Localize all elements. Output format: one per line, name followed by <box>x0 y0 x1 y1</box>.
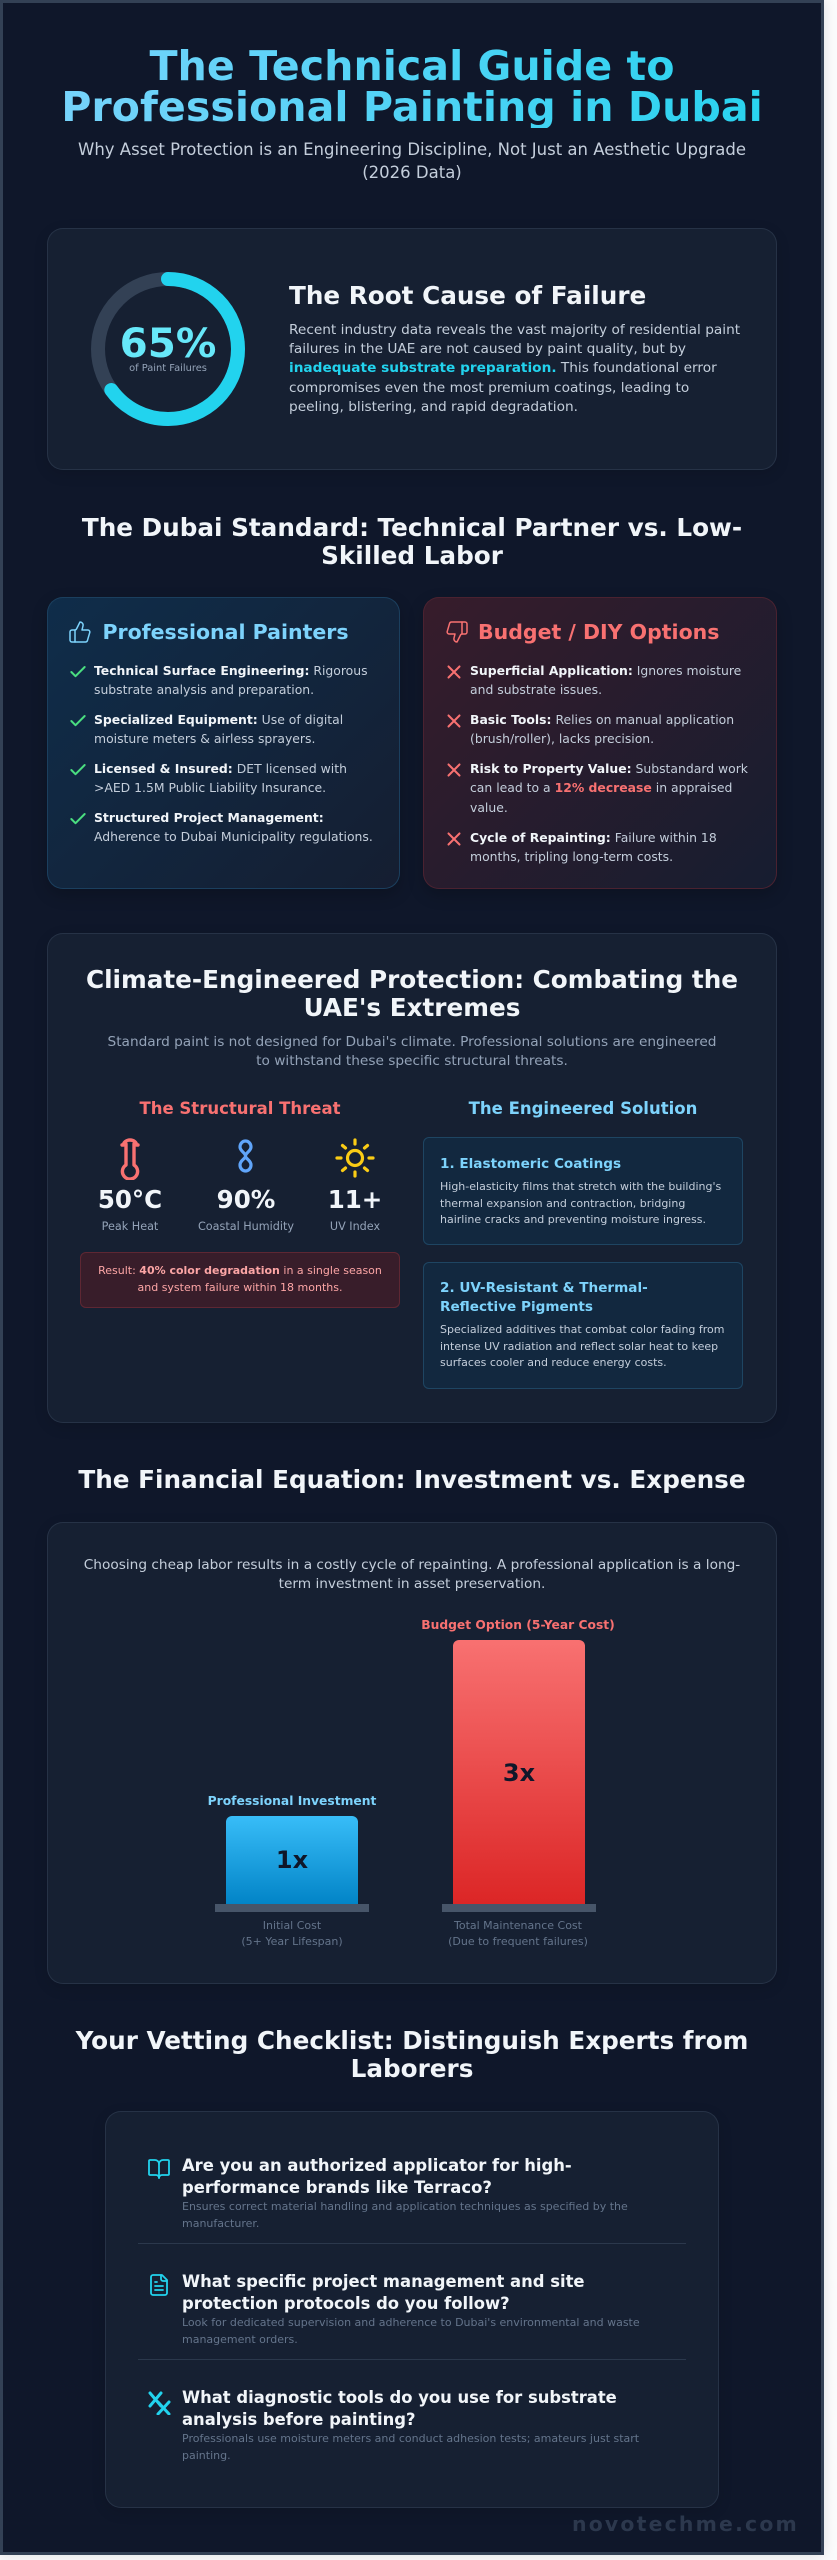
callout: result: and system failure within 18 months. <box>138 1280 342 1294</box>
intro text: term investment in asset preservation. <box>279 1576 545 1592</box>
card text: intense UV radiation and reflect solar heat to keep <box>440 1340 718 1352</box>
card title: 1. Elastomeric Coatings <box>440 1156 621 1172</box>
icon: check 4 <box>70 813 86 824</box>
cross item 2: Basic Tools: Relies on manual application <box>470 712 734 727</box>
question 2: What specific project management and site <box>182 2272 585 2291</box>
icon: check 3 <box>70 764 86 776</box>
bar: 1x: 1x <box>276 1846 308 1874</box>
cross item 4: months, tripling long-term costs. <box>470 849 673 864</box>
base <box>442 1904 596 1912</box>
label: uv index: UV Index <box>330 1220 380 1233</box>
cross item 3: Risk to Property Value: Substandard work <box>470 761 748 776</box>
card: uv-resistant pigments <box>423 1262 743 1389</box>
heading: engineered solution: The Engineered Solution <box>469 1099 697 1118</box>
intro text <box>84 1556 740 1592</box>
intro text: Standard paint is not designed for Dubai's climate. Professional solutions are engineered <box>108 1034 716 1050</box>
description 1: manufacturer. <box>182 2216 259 2230</box>
heading: vetting checklist: Laborers <box>351 2054 473 2082</box>
description 1: Ensures correct material handling and application techniques as specified by the <box>182 2200 628 2213</box>
description 2: Look for dedicated supervision and adherence to Dubai's environmental and waste <box>182 2316 640 2329</box>
bar: 3x <box>453 1640 585 1904</box>
heading: structural threat: The Structural Threat <box>139 1099 341 1118</box>
heading: professional painters: Professional Painters <box>102 620 349 644</box>
stat: peak heat: 50°C <box>98 1184 162 1214</box>
check item 4: Structured Project Management: <box>94 810 324 825</box>
panel: climate-engineered protection <box>47 933 777 1423</box>
check item 2 <box>94 712 343 746</box>
icon: diagnostic crosses <box>148 2391 172 2415</box>
question 1: performance brands like Terraco? <box>182 2178 492 2197</box>
heading: climate: Climate-Engineered Protection: Combating the <box>86 965 738 994</box>
panel: professional painters <box>47 597 400 889</box>
question 2: protection protocols do you follow? <box>182 2294 510 2313</box>
icon: cross 3 <box>448 763 460 777</box>
intro text <box>108 1034 716 1069</box>
question 3: What diagnostic tools do you use for substrate <box>182 2388 617 2407</box>
heading: root cause: The Root Cause of Failure <box>289 281 646 310</box>
cross item 2: (brush/roller), lacks precision. <box>470 731 654 746</box>
icon: book <box>148 2159 170 2179</box>
check item 1 <box>94 662 368 697</box>
description 3 <box>182 2431 639 2464</box>
heading: vetting checklist <box>75 2026 748 2082</box>
icon: sun <box>335 1138 375 1178</box>
cross item 4 <box>470 830 717 864</box>
heading: climate <box>86 965 738 1022</box>
icon: humidity <box>238 1139 253 1173</box>
check item 4 <box>94 810 373 844</box>
subtitle <box>78 140 746 182</box>
check item 1: substrate analysis and preparation. <box>94 682 314 697</box>
cross item 1: Superficial Application: Ignores moisture <box>470 662 741 678</box>
callout: result <box>80 1252 400 1308</box>
cross item 3: can lead to a 12% decrease in appraised <box>470 780 732 795</box>
icon: document <box>150 2274 168 2296</box>
question 2 <box>182 2271 585 2315</box>
card: elastomeric coatings <box>423 1137 743 1245</box>
icon: cross 1 <box>448 665 460 679</box>
heading: the dubai standard <box>82 513 742 570</box>
icon: thumbs up <box>69 621 91 643</box>
description 2: management orders. <box>182 2332 298 2346</box>
description 1 <box>182 2200 628 2230</box>
icon: cross 2 <box>448 714 460 728</box>
heading: the dubai standard: The Dubai Standard: Technical Partner vs. Low- <box>82 513 742 542</box>
heading: vetting checklist: Your Vetting Checklist: Distinguish Experts from <box>76 2026 748 2055</box>
card title <box>440 1280 648 1315</box>
card text: Specialized additives that combat color fading from <box>440 1323 724 1336</box>
icon: thermometer <box>120 1138 140 1180</box>
heading: climate: UAE's Extremes <box>304 992 520 1022</box>
intro text: Choosing cheap labor results in a costly cycle of repainting. A professional application is a long- <box>84 1556 740 1572</box>
title <box>0 46 824 128</box>
label: coastal humidity: Coastal Humidity <box>198 1220 294 1233</box>
check item 2: moisture meters & airless sprayers. <box>94 731 315 746</box>
check item 3: >AED 1.5M Public Liability Insurance. <box>94 780 326 795</box>
check item 1: Technical Surface Engineering: Rigorous <box>94 662 368 678</box>
bar: 3x: 3x <box>503 1759 535 1787</box>
icon: thumbs down <box>446 621 468 643</box>
card title: 2. UV-Resistant & Thermal- <box>440 1280 648 1296</box>
intro text: to withstand these specific structural threats. <box>256 1053 568 1069</box>
foot label: (5+ Year Lifespan) <box>241 1935 343 1948</box>
label: Budget Option (5-Year Cost) <box>421 1618 615 1632</box>
subtitle: (2026 Data) <box>362 162 462 182</box>
check item 2: Specialized Equipment: Use of digital <box>94 712 343 727</box>
card text <box>440 1323 724 1369</box>
panel: budget / diy options <box>423 597 777 889</box>
card text: thermal expansion and contraction, bridging <box>440 1196 685 1210</box>
cross item 4: Cycle of Repainting: Failure within 18 <box>470 830 717 845</box>
label: Professional Investment <box>208 1794 376 1808</box>
cross item 1 <box>470 662 741 697</box>
cross item 3 <box>470 761 748 815</box>
body text: peeling, blistering, and rapid degradation. <box>289 399 578 415</box>
foot label <box>448 1919 588 1948</box>
foot label: Total Maintenance Cost <box>454 1919 582 1932</box>
description 3: painting. <box>182 2448 231 2462</box>
body text <box>289 322 740 415</box>
card text: surfaces cooler and reduce energy costs. <box>440 1356 667 1369</box>
cross item 1: and substrate issues. <box>470 682 602 697</box>
heading: financial equation: The Financial Equation: Investment vs. Expense <box>78 1465 746 1494</box>
check item 3: Licensed & Insured: DET licensed with <box>94 761 347 776</box>
question 3: analysis before painting? <box>182 2410 416 2429</box>
callout: result: Result: 40% color degradation in a single season <box>98 1264 382 1277</box>
icon: check 1 <box>70 666 86 678</box>
icon: check 2 <box>70 715 86 726</box>
check item 3 <box>94 761 347 795</box>
cross item 2 <box>470 712 734 746</box>
bar group: professional investment <box>208 1794 376 1948</box>
icon: cross 4 <box>448 832 460 846</box>
question 1: Are you an authorized applicator for high- <box>182 2156 572 2175</box>
stat: uv index: 11+ <box>328 1184 382 1214</box>
heading: the dubai standard: Skilled Labor <box>321 540 503 570</box>
stat: coastal humidity: 90% <box>217 1184 275 1214</box>
label: peak heat: Peak Heat <box>102 1220 158 1233</box>
body text: inadequate substrate preparation. This foundational error <box>289 360 717 376</box>
panel: root cause of failure <box>47 228 777 470</box>
bar: 1x <box>226 1816 358 1904</box>
body text: failures in the UAE are not caused by paint quality, but by <box>289 341 686 357</box>
watermark: novotechme.com <box>572 2512 799 2536</box>
check item 4: Adherence to Dubai Municipality regulations. <box>94 829 373 844</box>
subtitle: Why Asset Protection is an Engineering Discipline, Not Just an Aesthetic Upgrade <box>78 140 746 159</box>
description 3: Professionals use moisture meters and conduct adhesion tests; amateurs just start <box>182 2432 639 2445</box>
donut chart: 65% <box>91 272 245 426</box>
foot label: (Due to frequent failures) <box>448 1935 588 1948</box>
stat label: of Paint Failures <box>129 363 207 374</box>
card title: Reflective Pigments <box>440 1299 593 1315</box>
base <box>215 1904 369 1912</box>
panel: vetting checklist <box>104 2111 719 2508</box>
question 1 <box>182 2156 572 2197</box>
bar group: budget option <box>421 1618 615 1948</box>
heading: budget options: Budget / DIY Options <box>478 620 719 644</box>
card text: hairline cracks and preventing moisture ingress. <box>440 1213 706 1226</box>
foot label <box>241 1919 343 1948</box>
question 3 <box>182 2387 617 2431</box>
card text: High-elasticity films that stretch with the building's <box>440 1180 721 1193</box>
stat: 65%: 65% <box>120 319 216 367</box>
foot label: Initial Cost <box>263 1919 321 1932</box>
description 2 <box>182 2315 640 2348</box>
cross item 3: value. <box>470 800 508 815</box>
panel: financial bar chart <box>47 1522 777 1984</box>
card text <box>440 1180 721 1226</box>
body text: Recent industry data reveals the vast majority of residential paint <box>289 322 740 338</box>
body text: compromises even the most premium coatings, leading to <box>289 380 689 396</box>
